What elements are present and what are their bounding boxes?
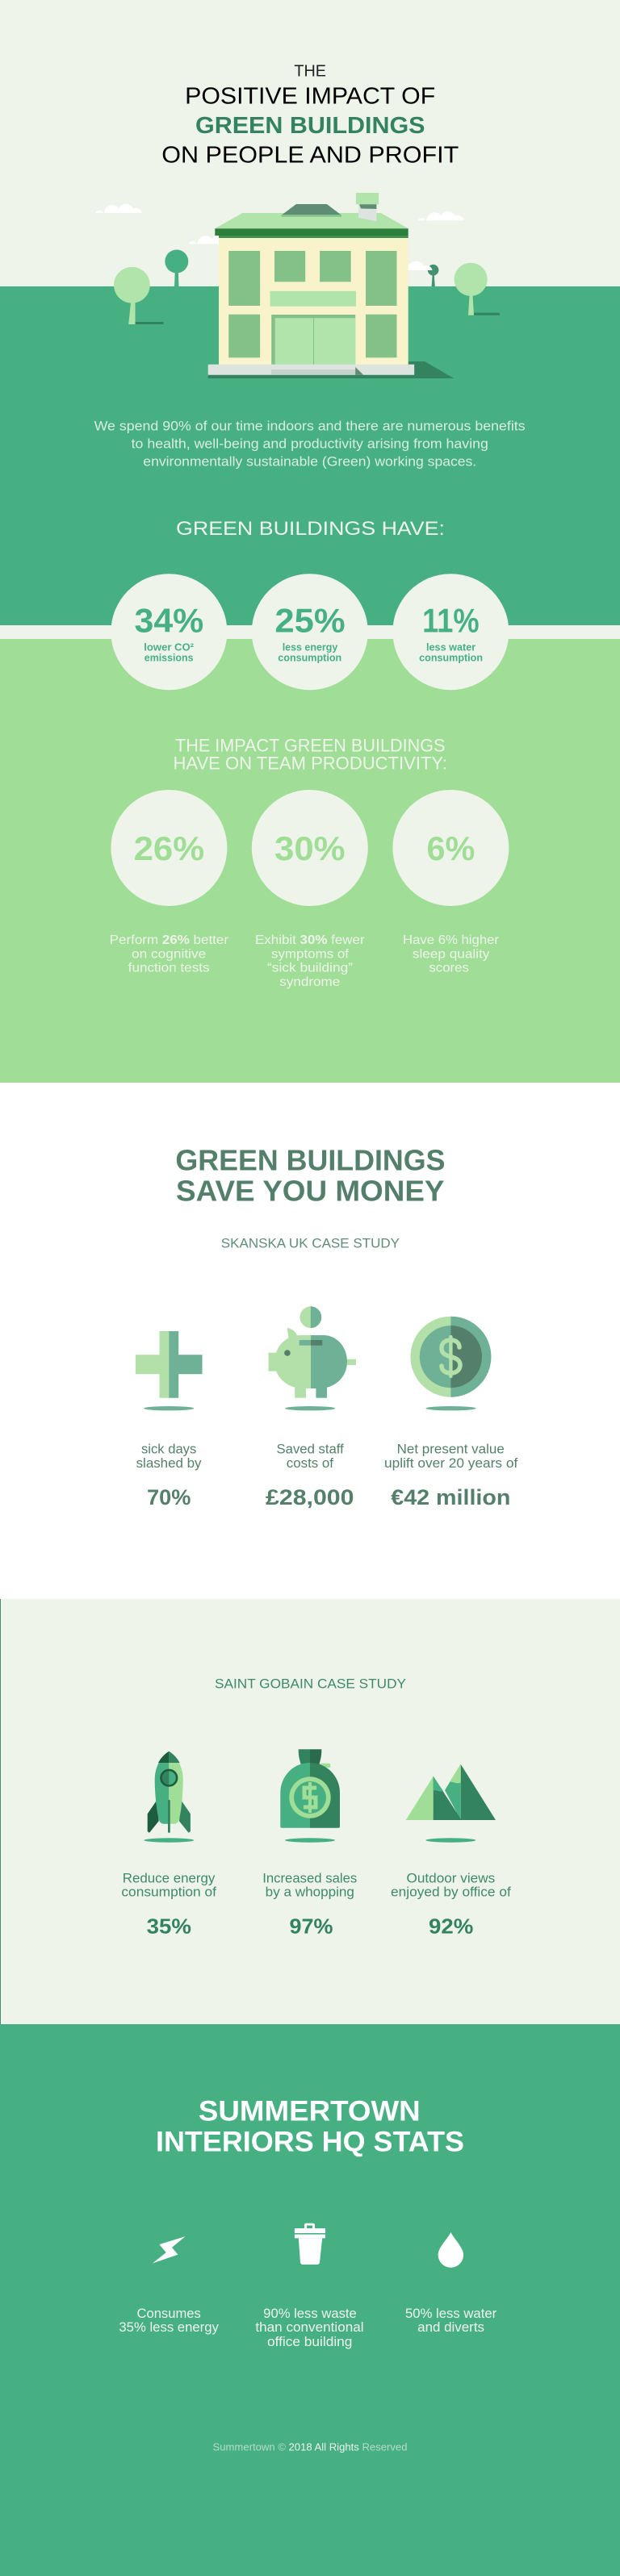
stat: 25 percent less energy: consumption <box>278 652 341 663</box>
panel: Saint Gobain case study <box>0 1599 620 2024</box>
stat: 11 percent less water: consumption <box>419 652 483 663</box>
stat: 25 percent less energy <box>252 574 368 690</box>
heading: green buildings have: GREEN BUILDINGS HAVE: <box>176 518 445 540</box>
stat: 34 percent lower CO2: lower CO² <box>144 641 194 653</box>
stat: net present value 42 million euros: Net present value <box>397 1442 505 1457</box>
intro text: to health, well-being and productivity arising from having <box>132 436 488 451</box>
stat: 26 percent cognitive function: Perform 26% better <box>110 933 229 947</box>
icon: waste bin <box>295 2223 325 2265</box>
stat: outdoor views 92 percent: enjoyed by office of <box>391 1885 511 1900</box>
stat: 26 percent cognitive function: 26% <box>134 829 204 867</box>
icon: mountains <box>406 1764 496 1843</box>
panel: productivity band <box>0 574 620 1083</box>
stat: 30 percent fewer symptoms: Exhibit 30% fewer <box>255 933 365 947</box>
subheading: Skanska case study: SKANSKA UK CASE STUDY <box>221 1237 400 1251</box>
stat: staff costs 28,000 pounds: costs of <box>287 1455 333 1471</box>
stat: less waste <box>255 2307 364 2349</box>
panel: hero with title and building <box>0 0 620 625</box>
stat: consumes less energy <box>119 2307 220 2335</box>
stat: net present value 42 million euros <box>384 1442 518 1509</box>
stat: 34 percent lower CO2: 34% <box>134 601 203 639</box>
stat: sick days 70 percent: slashed by <box>136 1455 202 1471</box>
icon: green tree back left <box>165 250 188 286</box>
title: THE <box>294 62 326 80</box>
title <box>161 62 459 168</box>
title: GREEN BUILDINGS <box>195 113 425 139</box>
heading: Summertown Interiors HQ stats <box>156 2095 464 2157</box>
icon: lightning bolt <box>153 2236 186 2263</box>
stat: sick days 70 percent: 70% <box>147 1485 191 1509</box>
heading: Summertown Interiors HQ stats: INTERIORS HQ STATS <box>156 2125 464 2157</box>
stat: consumes less energy: 35% less energy <box>119 2320 220 2335</box>
stat: 25 percent less energy: 25% <box>274 601 346 639</box>
icon: money bag <box>280 1749 340 1843</box>
heading: green buildings save you money: GREEN BUILDINGS <box>175 1144 446 1177</box>
stat: 34 percent lower CO2 <box>111 574 227 690</box>
stat: energy consumption 35 percent: 35% <box>147 1914 191 1939</box>
heading: green buildings save you money <box>175 1144 446 1208</box>
stat: sales 97 percent: by a whopping <box>266 1885 354 1900</box>
stat: less waste: office building <box>267 2335 352 2349</box>
stat: less water: 50% less water <box>405 2307 497 2321</box>
heading: team productivity: THE IMPACT GREEN BUILDINGS <box>175 736 446 756</box>
icon: large light tree left <box>114 267 163 324</box>
stat: sick days 70 percent: sick days <box>141 1442 196 1457</box>
stat: 11 percent less water: 11% <box>422 601 480 639</box>
icon: cloud behind building <box>386 261 433 270</box>
icon: large light tree right <box>454 263 500 315</box>
stat: sales 97 percent: 97% <box>289 1914 333 1939</box>
stat: consumes less energy: Consumes <box>137 2307 201 2321</box>
heading: Summertown Interiors HQ stats: SUMMERTOWN <box>199 2095 421 2127</box>
heading: green buildings save you money: SAVE YOU MONEY <box>176 1175 444 1208</box>
stat: sales 97 percent: Increased sales <box>262 1870 357 1885</box>
stat: 6 percent higher sleep quality: Have 6% higher <box>403 933 500 947</box>
heading: team productivity: HAVE ON TEAM PRODUCTIVITY: <box>173 754 447 774</box>
title: POSITIVE IMPACT OF <box>185 84 435 110</box>
stat: 30 percent fewer symptoms: 30% <box>274 829 346 867</box>
stat: sick days 70 percent <box>136 1442 202 1509</box>
stat: 26 percent cognitive function: on cognitive <box>132 947 206 961</box>
icon: clouds <box>95 204 464 244</box>
stat: outdoor views 92 percent: 92% <box>429 1914 473 1939</box>
panel: save you money <box>0 1083 620 1599</box>
stat: less water: and diverts <box>417 2320 484 2335</box>
stat: energy consumption 35 percent: consumption of <box>121 1885 216 1900</box>
intro text <box>94 418 526 469</box>
subheading: Saint Gobain case study: SAINT GOBAIN CASE STUDY <box>215 1676 406 1691</box>
stat: energy consumption 35 percent <box>121 1870 216 1939</box>
stat: 11 percent less water: less water <box>426 641 475 653</box>
stat: staff costs 28,000 pounds: Saved staff <box>276 1442 344 1457</box>
stat: 6 percent higher sleep quality: 6% <box>426 829 475 867</box>
stat: net present value 42 million euros: uplift over 20 years of <box>384 1455 518 1471</box>
stat: 6 percent higher sleep quality <box>392 790 509 975</box>
stat: 11 percent less water <box>392 574 509 690</box>
icon: small dark tree back right <box>428 265 438 286</box>
stat: 26 percent cognitive function <box>110 790 229 975</box>
stat: 30 percent fewer symptoms: syndrome <box>279 975 340 989</box>
title: ON PEOPLE AND PROFIT <box>161 142 459 168</box>
panel: Summertown HQ stats <box>0 2024 620 2576</box>
icon: rocket <box>144 1751 194 1843</box>
intro text: We spend 90% of our time indoors and there are numerous benefits <box>94 418 526 433</box>
stat: 26 percent cognitive function: function tests <box>128 962 210 975</box>
stat: less waste: 90% less waste <box>263 2307 357 2321</box>
stat: energy consumption 35 percent: Reduce energy <box>123 1870 216 1885</box>
stat: staff costs 28,000 pounds <box>266 1442 354 1509</box>
stat: less water <box>405 2307 497 2335</box>
stat: 30 percent fewer symptoms: “sick building” <box>267 962 353 975</box>
illustration: green building <box>208 193 454 378</box>
footer: Summertown © 2018 All Rights Reserved <box>213 2441 408 2453</box>
stat: 25 percent less energy: less energy <box>283 641 337 653</box>
icon: medical cross <box>136 1331 202 1410</box>
stat: outdoor views 92 percent: Outdoor views <box>407 1870 495 1885</box>
stat: 6 percent higher sleep quality: scores <box>429 962 469 975</box>
heading: team productivity <box>173 736 447 774</box>
stat: 30 percent fewer symptoms <box>252 790 368 989</box>
icon: dollar coin <box>410 1317 491 1410</box>
stat: 6 percent higher sleep quality: sleep quality <box>413 947 489 961</box>
stat: sales 97 percent <box>262 1870 357 1939</box>
stat: net present value 42 million euros: €42 million <box>391 1485 510 1509</box>
stat: less waste: than conventional <box>255 2320 364 2335</box>
stat: 30 percent fewer symptoms: symptoms of <box>271 947 350 961</box>
stat: outdoor views 92 percent <box>391 1870 511 1939</box>
stat: 34 percent lower CO2: emissions <box>145 652 194 663</box>
intro text: environmentally sustainable (Green) working spaces. <box>143 453 476 469</box>
icon: water drop <box>438 2232 463 2268</box>
stat: staff costs 28,000 pounds: £28,000 <box>266 1485 354 1509</box>
icon: piggy bank <box>268 1306 356 1410</box>
